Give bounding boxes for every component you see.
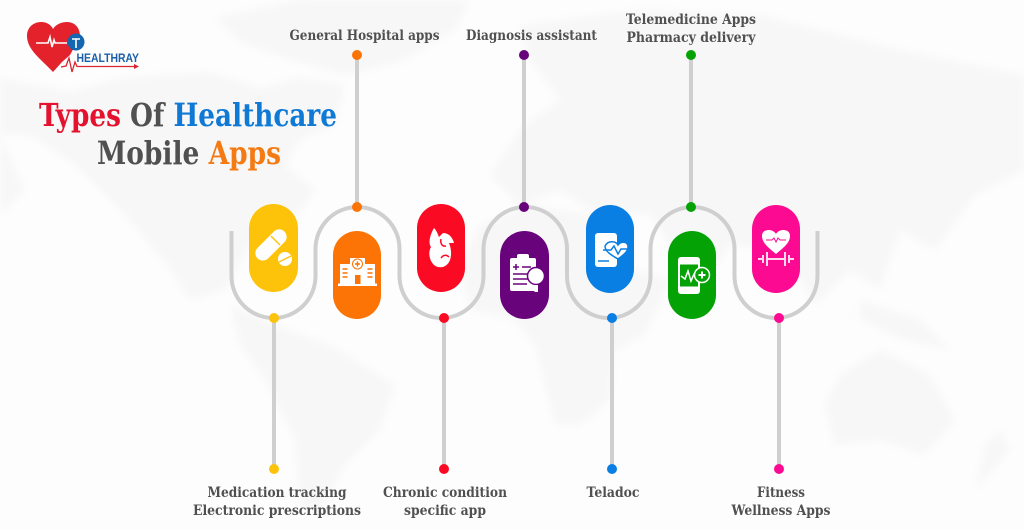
icon: caduceus badge <box>68 34 84 50</box>
connector: vertical leader lines <box>274 55 779 469</box>
step 5: teladoc <box>586 205 640 501</box>
icon: clipboard and magnifier <box>510 254 544 292</box>
step 6: telemedicine <box>626 12 756 319</box>
icon: phone with plus <box>678 257 710 294</box>
icon: hospital <box>338 258 377 286</box>
label: telemedicine apps: Telemedicine Apps <box>626 12 756 28</box>
step 3: chronic <box>383 204 507 501</box>
icon: anatomical heart <box>429 228 454 267</box>
label: chronic condition: Chronic condition <box>383 485 507 501</box>
step 4: diagnosis <box>466 28 597 319</box>
step 7: fitness <box>752 205 805 501</box>
label: general hospital: General Hospital apps <box>290 28 440 44</box>
label: fitness: Fitness <box>757 485 805 501</box>
icon: heart <box>27 22 80 72</box>
icon: heart and dumbbell <box>758 230 794 266</box>
title: Types Of Healthcare <box>39 96 337 134</box>
icon: pills <box>252 226 292 266</box>
label: specific app: specific app <box>404 503 486 519</box>
step 1: medication <box>208 204 347 501</box>
connector: serpentine line <box>232 207 818 318</box>
label: pharmacy delivery: Pharmacy delivery <box>626 30 756 46</box>
label: wellness apps: Wellness Apps <box>731 503 831 519</box>
logo: Healthray <box>27 22 139 72</box>
title <box>39 96 337 172</box>
label: diagnosis assistant: Diagnosis assistant <box>466 28 597 44</box>
icon: phone with heart <box>595 233 629 267</box>
step 2: hospital <box>290 28 440 319</box>
title: Mobile Apps <box>97 134 281 172</box>
label: teladoc: Teladoc <box>586 485 640 501</box>
logo wordmark: HEALTHRAY <box>76 53 139 65</box>
label: medication: Medication tracking <box>208 485 347 501</box>
label: electronic prescriptions: Electronic prescriptions <box>193 503 361 519</box>
